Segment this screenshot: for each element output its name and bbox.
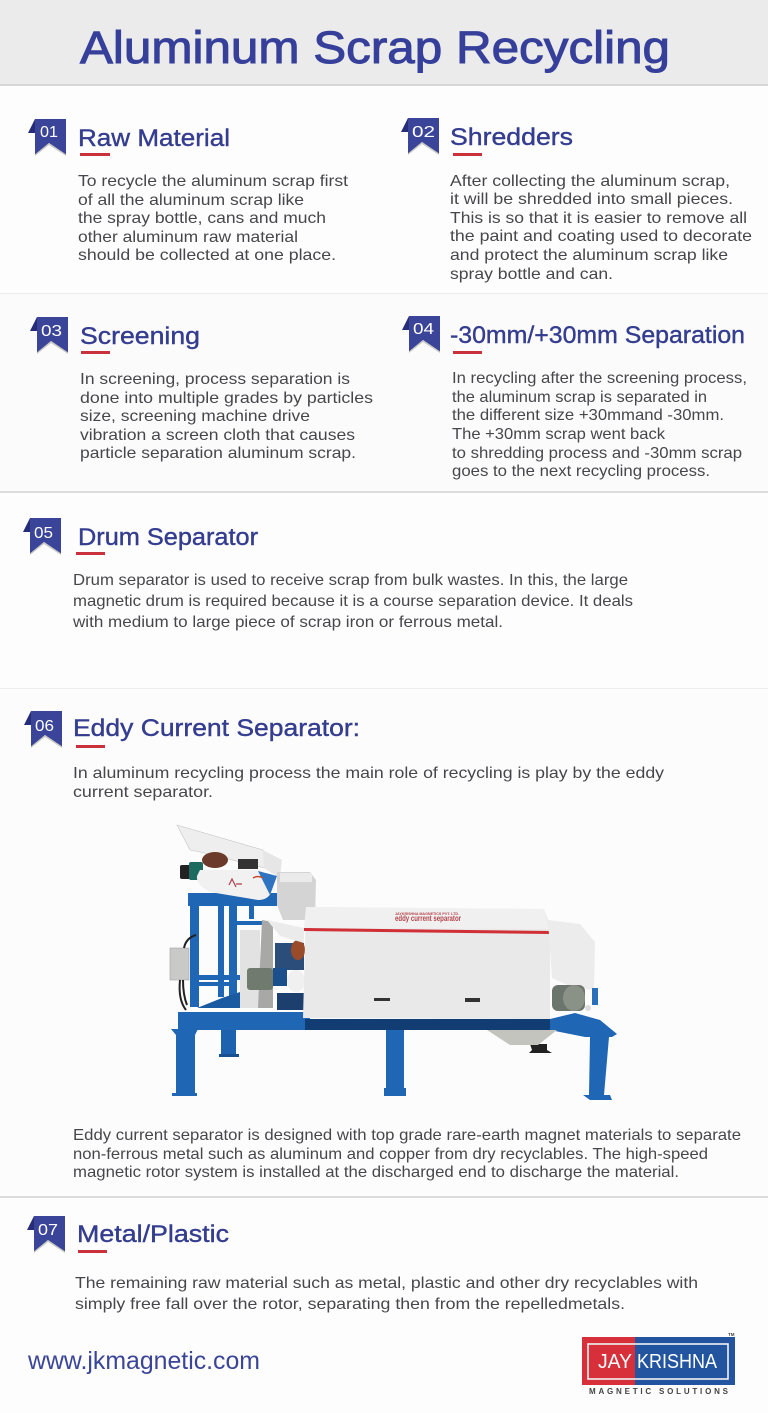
text: screening body: size, screening machine drive [80, 408, 310, 425]
text: separation body: the aluminum scrap is separated in [452, 389, 707, 406]
icon: ribbon 02: 02 [412, 124, 435, 141]
text: raw material body: To recycle the aluminum scrap first [78, 173, 349, 190]
heading: metal/plastic: Metal/Plastic [77, 1221, 229, 1248]
panel: 04 separation [402, 316, 747, 480]
text: shredders body: This is so that it is easier to remove all [450, 210, 747, 227]
text: screening body [80, 371, 373, 462]
text: eddy intro: In aluminum recycling process the main role of recycling is play by the eddy [73, 765, 664, 782]
icon: ribbon 05 [23, 518, 61, 555]
logo: Jay Krishna: MAGNETIC SOLUTIONS [589, 1387, 729, 1396]
text: shredders body [450, 173, 752, 283]
icon: ribbon 05: 05 [34, 525, 53, 542]
text: shredders body: spray bottle and can. [450, 266, 613, 283]
image: eddy current separator machine [170, 825, 617, 1100]
logo: Jay Krishna: KRISHNA [637, 1351, 718, 1373]
text: eddy intro: current separator. [73, 784, 213, 801]
text: raw material body: other aluminum raw material [78, 229, 298, 246]
text: shredders body: it will be shredded into small pieces. [450, 191, 733, 208]
text: drum separator body: with medium to large piece of scrap iron or ferrous metal. [72, 614, 503, 631]
text: raw material body [78, 173, 349, 264]
text: eddy intro [73, 765, 664, 801]
text: separation body: In recycling after the screening process, [452, 370, 747, 387]
icon: ribbon 03: 03 [41, 323, 62, 340]
icon: ribbon 03 [30, 317, 68, 354]
text: metal/plastic body: The remaining raw material such as metal, plastic and other dry recyclables with [75, 1275, 698, 1292]
panel: 05 drum separator [23, 518, 633, 631]
icon: ribbon 01: 01 [40, 124, 58, 141]
title banner [0, 0, 768, 86]
text: shredders body: and protect the aluminum scrap like [450, 247, 728, 264]
panel: 01 raw material [28, 119, 349, 264]
website url: www.jkmagnetic.com [27, 1347, 260, 1375]
image: eddy current separator machine: JAYKRISHNA MAGNETICS PVT. LTD. [395, 911, 459, 916]
icon: ribbon 07 [27, 1216, 65, 1253]
heading: eddy current separator: Eddy Current Separator: [73, 715, 360, 742]
text: shredders body: After collecting the aluminum scrap, [450, 173, 730, 190]
text: eddy description: Eddy current separator is designed with top grade rare-earth magnet materials to separate [73, 1127, 741, 1144]
text: metal/plastic body [75, 1275, 698, 1313]
text: screening body: particle separation aluminum scrap. [80, 445, 356, 462]
text: separation body [452, 370, 747, 480]
text: separation body: to shredding process and -30mm scrap [452, 445, 742, 462]
icon: ribbon 07: 07 [38, 1222, 58, 1239]
text: drum separator body: magnetic drum is required because it is a course separation device. It deals [73, 593, 633, 610]
text: separation body: The +30mm scrap went back [452, 426, 666, 443]
text: drum separator body: Drum separator is used to receive scrap from bulk wastes. In this, the large [73, 572, 628, 589]
text: screening body: In screening, process separation is [80, 371, 350, 388]
text: raw material body: should be collected at one place. [78, 247, 336, 264]
text: raw material body: the spray bottle, cans and much [78, 210, 326, 227]
text: raw material body: of all the aluminum scrap like [78, 192, 304, 209]
heading: separation: -30mm/+30mm Separation [450, 322, 745, 349]
icon: ribbon 04: 04 [413, 321, 434, 338]
image: eddy current separator machine: eddy current separator [395, 914, 461, 923]
heading: shredders: Shredders [450, 124, 573, 151]
text: separation body: the different size +30mmand -30mm. [452, 407, 724, 424]
text: drum separator body [72, 572, 633, 631]
text: metal/plastic body: simply free fall over the rotor, separating then from the repelledmetals. [75, 1296, 625, 1313]
logo: Jay Krishna: JAY [598, 1351, 632, 1373]
heading: screening: Screening [80, 323, 200, 350]
heading: raw material: Raw Material [78, 125, 230, 152]
panel: 02 shredders [401, 118, 752, 283]
text: eddy description: magnetic rotor system is installed at the discharged end to discharge the material. [73, 1164, 679, 1181]
panel: 06 eddy current separator [24, 711, 741, 1181]
icon: ribbon 06 [24, 711, 62, 748]
logo: Jay Krishna: TM [728, 1332, 735, 1337]
logo: Jay Krishna [582, 1332, 735, 1396]
text: shredders body: the paint and coating used to decorate [450, 228, 752, 245]
text: screening body: vibration a screen cloth that causes [80, 427, 355, 444]
title: Aluminum Scrap Recycling [80, 22, 670, 73]
text: eddy description: non-ferrous metal such as aluminum and copper from dry recyclables. The high-speed [73, 1146, 708, 1163]
text: eddy description [73, 1127, 741, 1181]
icon: ribbon 06: 06 [35, 718, 54, 735]
icon: ribbon 02 [401, 118, 439, 155]
panel: 03 screening [30, 317, 373, 462]
heading: drum separator: Drum Separator [78, 524, 258, 551]
text: separation body: goes to the next recycling process. [452, 463, 710, 480]
text: screening body: done into multiple grades by particles [80, 390, 373, 407]
icon: ribbon 01 [28, 119, 66, 156]
panel: 07 metal/plastic [27, 1216, 698, 1313]
icon: ribbon 04 [402, 316, 440, 353]
